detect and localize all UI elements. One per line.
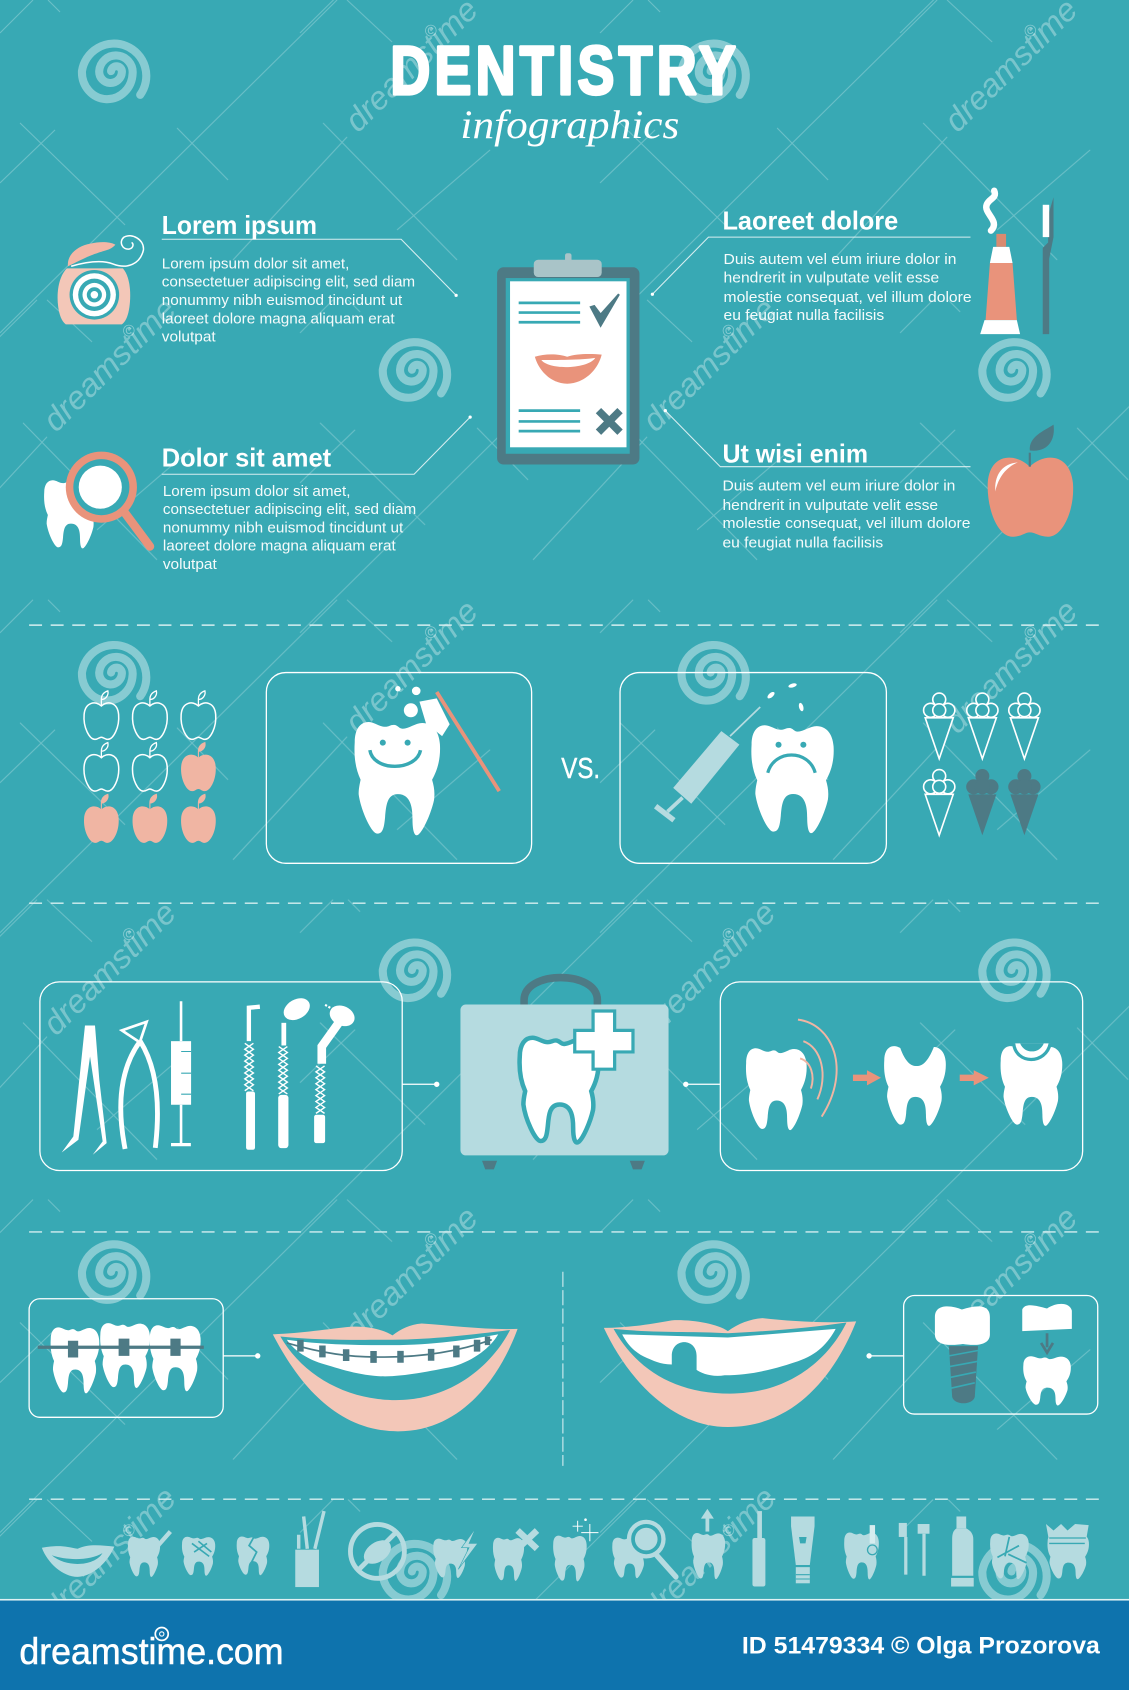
icon: smile with missing tooth — [604, 1318, 856, 1427]
watermark spirals — [82, 44, 1047, 1599]
apples grid — [84, 691, 216, 843]
panel: ut wisi enim: hendrerit in vulputate velit esse — [722, 497, 938, 514]
icon: tube — [791, 1516, 815, 1583]
panel: dolor sit amet: consectetuer adipiscing elit, sed diam — [163, 501, 416, 518]
footer banner — [0, 1599, 1129, 1690]
panel: lorem ipsum: laoreet dolore magna aliquam erat — [162, 310, 395, 327]
panel: lorem ipsum: volutpat — [162, 329, 216, 346]
icon: dental mirror — [278, 994, 314, 1148]
panel: lorem ipsum: Lorem ipsum dolor sit amet, — [162, 255, 349, 272]
footer banner: dreamstime.com — [19, 1631, 284, 1672]
watermark text: © — [722, 1522, 734, 1540]
footer banner: ID 51479334 © Olga Prozorova — [742, 1633, 1101, 1659]
connector — [866, 1353, 904, 1359]
icon: no candy sign — [350, 1524, 404, 1578]
icon: toothpaste — [951, 1516, 974, 1587]
icon: toothpaste and toothbrush — [980, 191, 1054, 334]
panel: ut wisi enim: Duis autem vel eum iriure dolor in — [722, 477, 955, 494]
icon: tooth with magnifier — [612, 1522, 676, 1578]
icon: tooth with cross — [493, 1530, 537, 1581]
panel: laoreet dolore: eu feugiat nulla facilisis — [724, 307, 884, 324]
icon: tooth with lightning — [433, 1528, 478, 1578]
watermark text: dreamstime — [937, 1199, 1084, 1347]
watermark text: dreamstime — [36, 894, 183, 1042]
dashed dividers — [29, 625, 1102, 1499]
icon: tooth with brush marks — [182, 1537, 215, 1576]
watermark text: © — [722, 926, 734, 944]
ice cream grid — [924, 693, 1041, 835]
connector — [223, 1353, 260, 1359]
icon: apple — [988, 425, 1073, 537]
panel: tooth treatment steps — [720, 982, 1083, 1170]
icon: tooth with arrow — [692, 1509, 725, 1579]
panel: ut wisi enim: molestie consequat, vel illum dolore — [722, 515, 970, 532]
panel: sad tooth — [620, 673, 886, 863]
title — [390, 32, 740, 147]
panel: dolor sit amet: nonummy nibh euismod tincidunt ut — [163, 519, 404, 536]
text: vs: VS. — [561, 753, 600, 785]
panel: laoreet dolore — [651, 208, 972, 324]
title: infographics — [460, 102, 679, 147]
panel: dolor sit amet — [162, 415, 472, 573]
icon: electric toothbrush — [752, 1511, 765, 1587]
icon: smile with braces — [273, 1324, 518, 1431]
icon: tooth with sparkle — [553, 1518, 598, 1581]
panel: laoreet dolore: molestie consequat, vel illum dolore — [724, 289, 972, 306]
watermark text: © — [1024, 23, 1036, 41]
title: DENTISTRY — [390, 32, 740, 109]
panel: lorem ipsum: nonummy nibh euismod tincidunt ut — [162, 292, 403, 309]
watermark text: dreamstime — [36, 1480, 183, 1627]
watermark text: dreamstime — [337, 1199, 485, 1347]
panel: lorem ipsum — [162, 212, 458, 346]
watermark text: dreamstime — [36, 291, 183, 438]
watermark text: dreamstime — [937, 593, 1084, 740]
watermark text: dreamstime — [635, 894, 783, 1042]
panel: ut wisi enim — [664, 409, 970, 552]
watermark text: © — [123, 1522, 135, 1540]
icon: dental drill — [314, 1002, 358, 1143]
icon: first aid case — [460, 978, 669, 1169]
watermark text: dreamstime — [635, 1480, 783, 1627]
panel: dolor sit amet: volutpat — [163, 556, 218, 573]
watermark text: © — [1024, 624, 1036, 642]
panel: lorem ipsum: Lorem ipsum — [162, 212, 317, 240]
watermark text: © — [425, 23, 437, 41]
icon: pliers — [62, 1026, 107, 1155]
panel: laoreet dolore: Laoreet dolore — [722, 208, 898, 236]
vertical divider — [562, 1272, 564, 1466]
icon: probe — [245, 1007, 260, 1150]
icon: small smile — [42, 1545, 114, 1577]
watermark text: © — [123, 926, 135, 944]
icon: tooth with check — [128, 1532, 170, 1577]
panel: dolor sit amet: Dolor sit amet — [162, 445, 331, 473]
icon strip — [42, 1509, 1089, 1587]
watermark text: dreamstime — [635, 291, 783, 438]
watermark text: © — [722, 322, 734, 340]
connector — [683, 1082, 720, 1087]
panel: laoreet dolore: hendrerit in vulputate velit esse — [724, 269, 939, 286]
icon: cracked tooth — [237, 1536, 269, 1575]
icon: cup with toothbrushes — [295, 1511, 324, 1587]
watermark text: dreamstime — [337, 593, 485, 740]
icon: dental floss — [58, 236, 143, 324]
icon: forceps — [121, 1022, 157, 1149]
icon: tooth with magnifier — [44, 452, 150, 548]
panel: ut wisi enim: Ut wisi enim — [722, 440, 868, 468]
icon: tooth with probe — [844, 1525, 879, 1579]
watermark text: © — [123, 322, 135, 340]
panel: dolor sit amet: laoreet dolore magna aliquam erat — [163, 538, 397, 555]
watermark text: © — [1024, 1231, 1036, 1249]
panel: happy tooth — [266, 673, 532, 863]
panel: ut wisi enim: eu feugiat nulla facilisis — [722, 535, 883, 552]
panel: dental implant and crown — [904, 1296, 1098, 1414]
connector — [402, 1082, 439, 1087]
icon: syringe — [171, 1001, 191, 1145]
watermark text: © — [425, 624, 437, 642]
panel: laoreet dolore: Duis autem vel eum iriure dolor in — [724, 251, 956, 268]
icon: broken tooth — [990, 1534, 1029, 1579]
icon: clipboard — [497, 253, 639, 465]
panel: dental instruments — [40, 982, 402, 1170]
watermark text: © — [425, 1231, 437, 1249]
panel: dolor sit amet: Lorem ipsum dolor sit amet, — [163, 483, 350, 500]
icon: tooth with crown — [1046, 1524, 1089, 1579]
panel: lorem ipsum: consectetuer adipiscing elit, sed diam — [162, 274, 415, 291]
icon: small instruments — [899, 1523, 930, 1576]
panel: braces teeth — [29, 1299, 223, 1417]
